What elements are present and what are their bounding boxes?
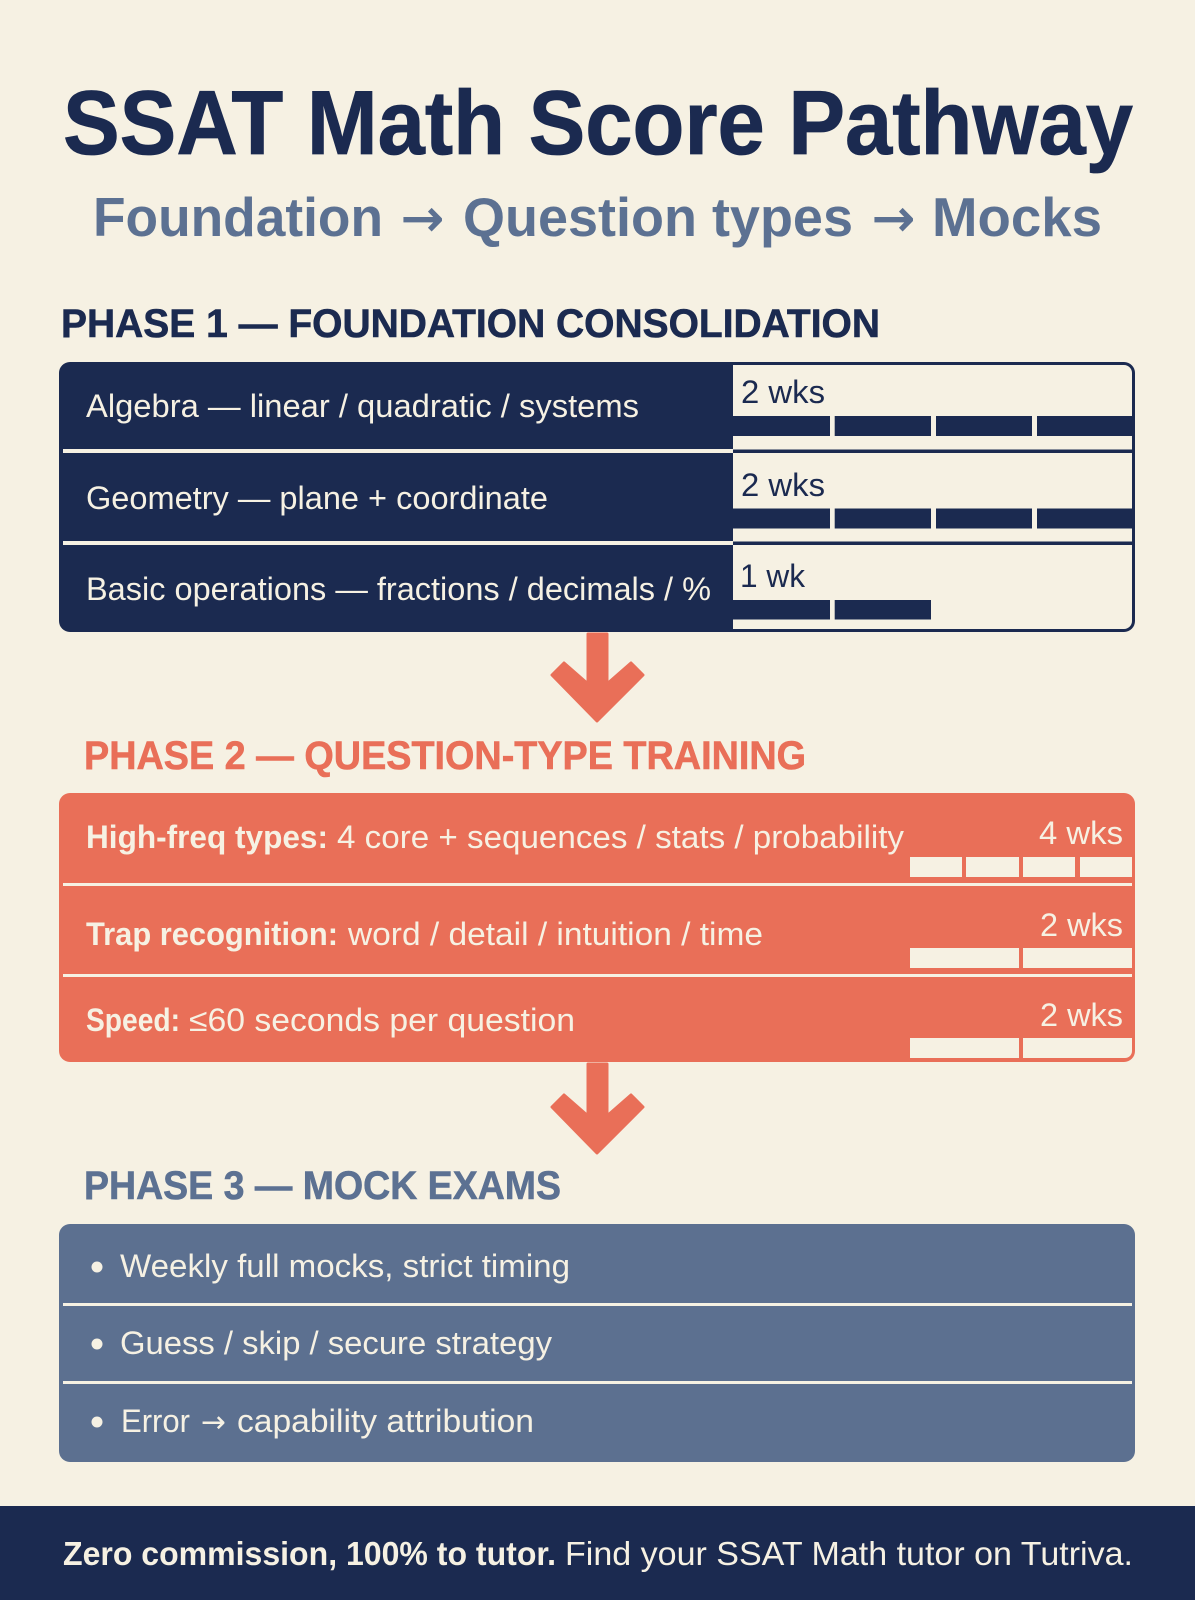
row: geometry: 2 wks (741, 467, 825, 503)
subtitle: Question types (463, 186, 853, 248)
heading: phase 1: PHASE 1 — FOUNDATION CONSOLIDATION (61, 302, 880, 346)
heading: phase 3: PHASE 3 — MOCK EXAMS (84, 1164, 561, 1208)
footer banner: Find your SSAT Math tutor on Tutriva. (565, 1535, 1133, 1572)
arrow: phase 2 to phase 3 (552, 1064, 643, 1153)
subtitle: → (401, 189, 444, 249)
row: speed: 2 wks (1040, 997, 1123, 1033)
heading: phase 2: PHASE 2 — QUESTION-TYPE TRAINING (84, 734, 806, 778)
row: weekly mocks: Weekly full mocks, strict timing (120, 1248, 570, 1284)
row: geometry (86, 467, 1135, 528)
row: high-freq types (86, 815, 1132, 877)
row: high-freq types: High-freq types: (86, 819, 328, 855)
row: algebra: 2 wks (741, 374, 825, 410)
title: SSAT Math Score Pathway (63, 73, 1133, 174)
row: trap recognition: 2 wks (1040, 907, 1123, 943)
row: basic operations: Basic operations — fractions / decimals / % (86, 571, 711, 607)
row: speed: Speed: (86, 1002, 180, 1038)
row: high-freq types: 4 core + sequences / stats / probability (337, 819, 904, 855)
panel: phase 2 question-type training (59, 793, 1135, 1062)
footer banner (0, 1506, 1195, 1600)
subtitle: Foundation (93, 186, 383, 248)
row: error attribution: capability attribution (237, 1403, 534, 1439)
subtitle (93, 186, 1102, 249)
row: trap recognition (86, 907, 1132, 968)
row: error attribution: Error (121, 1403, 190, 1439)
row: geometry: Geometry — plane + coordinate (86, 480, 548, 516)
row: speed: ≤60 seconds per question (189, 1002, 575, 1038)
arrow: phase 1 to phase 2 (552, 634, 643, 721)
row: high-freq types: 4 wks (1039, 815, 1123, 851)
row: error attribution: → (201, 1405, 226, 1440)
row: trap recognition: Trap recognition: (86, 916, 338, 952)
row: algebra (86, 374, 1135, 436)
footer banner: Zero commission, 100% to tutor. (63, 1535, 556, 1572)
row: basic operations: 1 wk (740, 558, 806, 594)
row: trap recognition: word / detail / intuition / time (347, 916, 763, 952)
row: error attribution (92, 1403, 534, 1440)
row: strategy: Guess / skip / secure strategy (120, 1325, 552, 1361)
subtitle: Mocks (932, 186, 1102, 248)
panel: phase 1 foundation (59, 362, 1135, 632)
row: algebra: Algebra — linear / quadratic / systems (86, 388, 639, 424)
row: basic operations (86, 558, 931, 620)
subtitle: → (872, 189, 915, 249)
panel: phase 3 mock exams (59, 1224, 1135, 1462)
row: speed (86, 997, 1132, 1058)
